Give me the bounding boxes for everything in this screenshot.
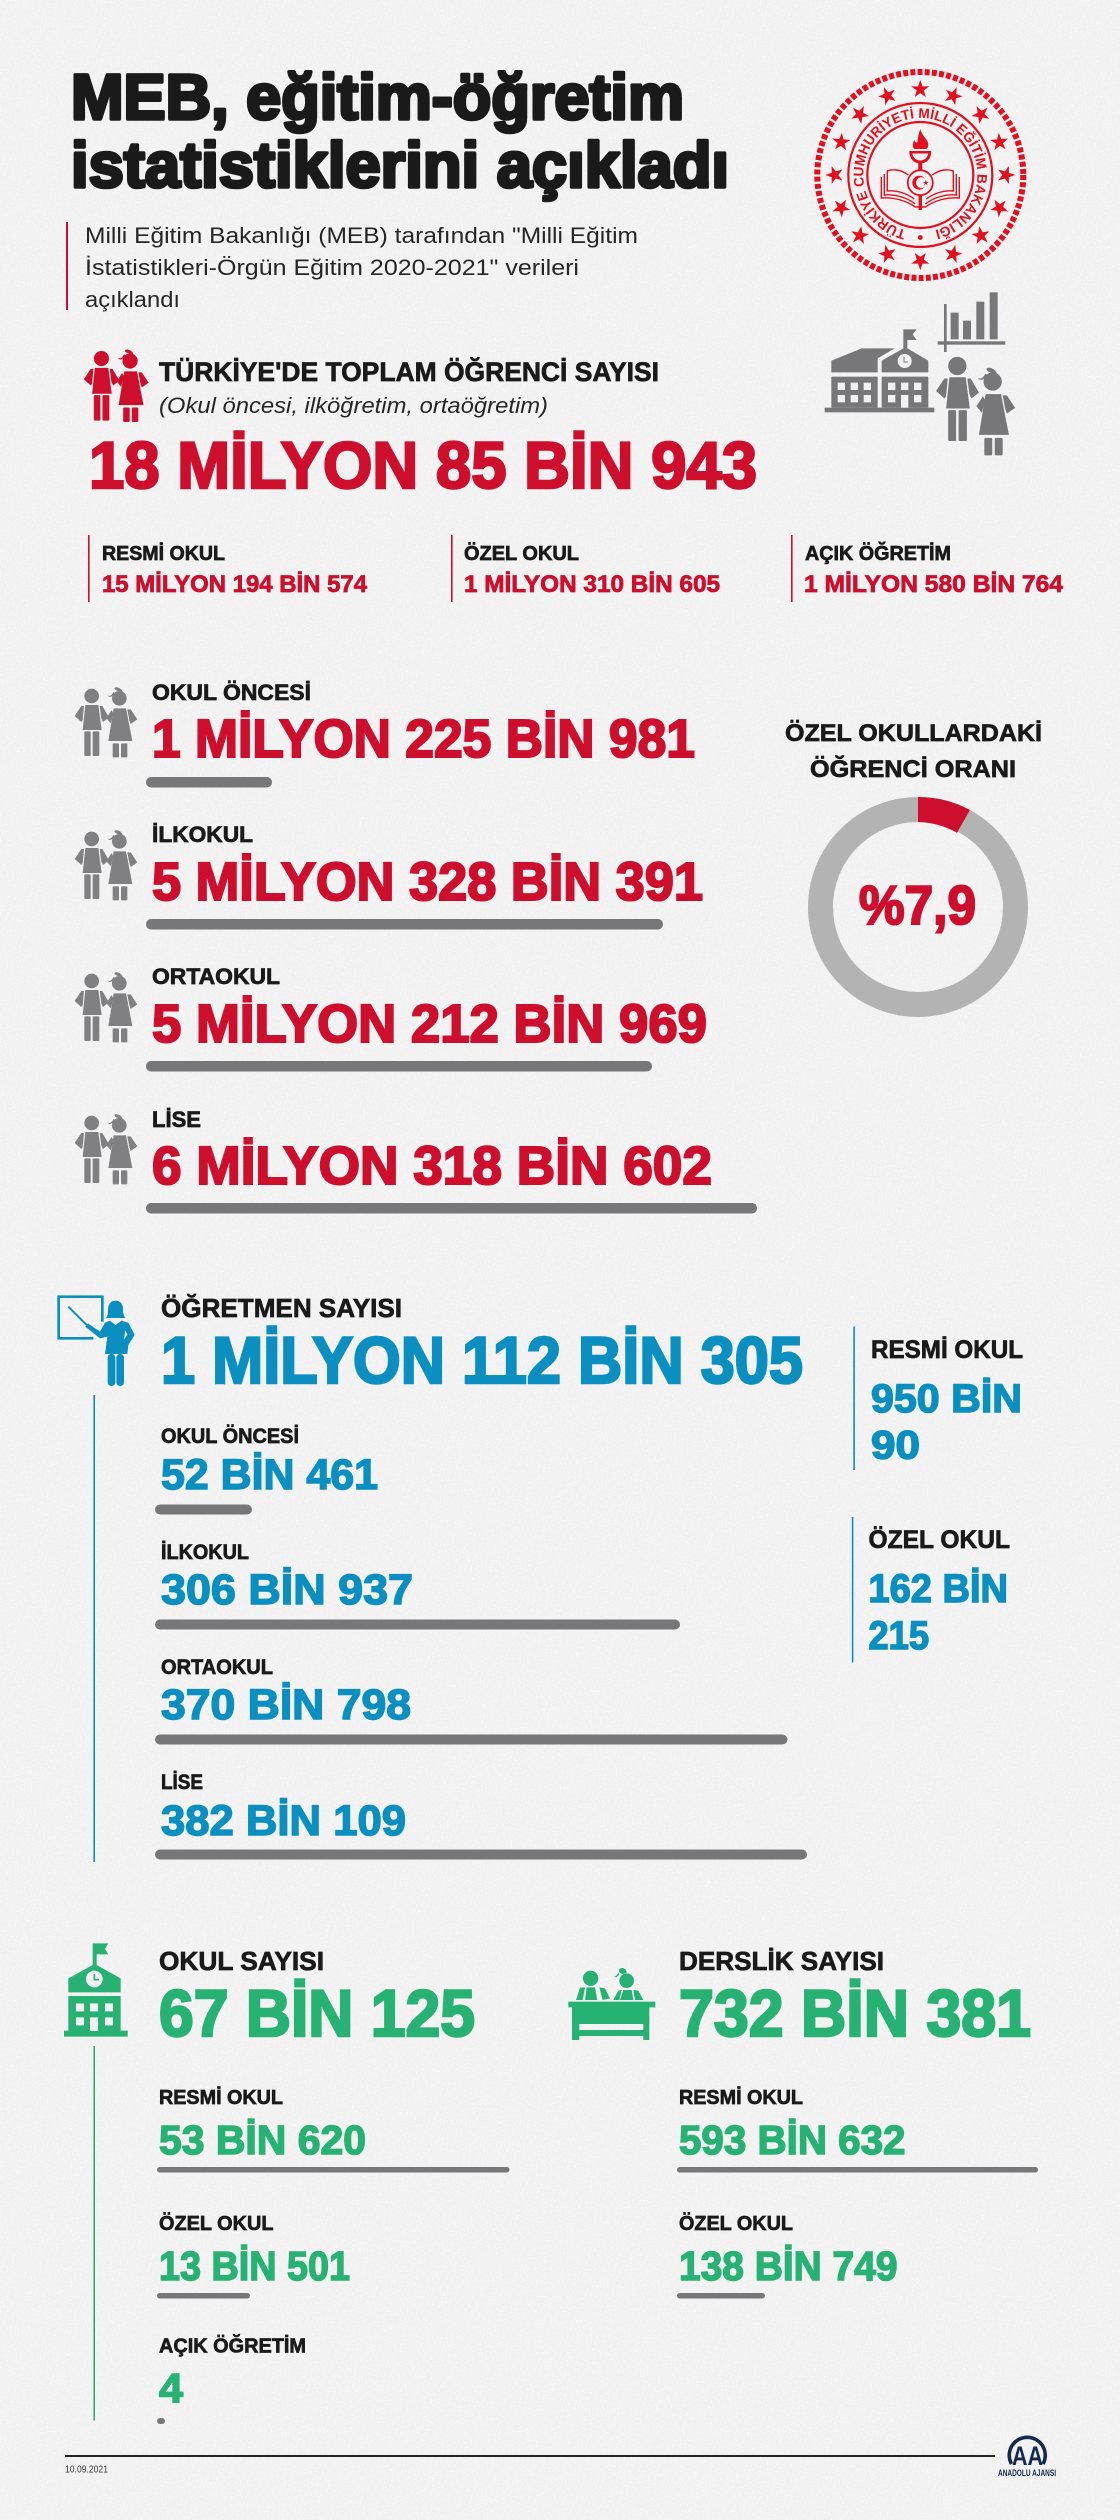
row: lise: 6 MİLYON 318 BİN 602	[152, 1136, 712, 1196]
icon: students	[936, 357, 1015, 455]
panel: breakdown by school type	[88, 535, 1063, 602]
callout: özel okul: ÖZEL OKUL	[868, 1525, 1010, 1554]
icon: students red	[84, 349, 149, 422]
total number: 732 BİN 381	[679, 1976, 1031, 2050]
row: ortaokul	[75, 964, 707, 1072]
callout: özel okul: 162 BİN	[868, 1567, 1008, 1611]
panel: breakdown by school type: 15 MİLYON 194 BİN 574	[102, 571, 367, 598]
footer	[65, 2437, 1056, 2479]
row: açık öğretim: 4	[159, 2365, 183, 2411]
icon: school, chart and students	[825, 292, 1015, 455]
total number: 18 MİLYON 85 BİN 943	[89, 428, 757, 502]
row: resmi okul: RESMİ OKUL	[159, 2086, 283, 2109]
icon: teacher	[59, 1297, 135, 1386]
row: resmi okul	[677, 2086, 1038, 2172]
row: ilkokul: İLKOKUL	[161, 1541, 249, 1564]
row: ilkokul	[75, 822, 703, 930]
icon: bar chart	[938, 292, 1005, 352]
row: resmi okul: 593 BİN 632	[679, 2117, 906, 2163]
heading: ÖZEL OKULLARDAKİ	[785, 720, 1042, 747]
date: 10.09.2021	[65, 2464, 108, 2476]
icon: ministry seal	[814, 69, 1026, 281]
panel: classrooms	[568, 1946, 1038, 2298]
icon: desk with students	[568, 1968, 655, 2040]
callout: resmi okul: 90	[871, 1424, 920, 1468]
row: özel okul: ÖZEL OKUL	[159, 2212, 274, 2235]
panel: students by level	[75, 680, 757, 1214]
panel: total students	[84, 349, 757, 502]
row: ilkokul: 5 MİLYON 328 BİN 391	[152, 852, 703, 912]
callout: resmi okul: RESMİ OKUL	[871, 1336, 1023, 1364]
row: okul öncesi	[155, 1425, 378, 1514]
panel: breakdown by school type: ÖZEL OKUL	[464, 542, 579, 565]
icon: school	[64, 1943, 128, 2037]
icon: Anadolu Ajansı logo: AA	[1012, 2441, 1043, 2471]
subheading: (Okul öncesi, ilköğretim, ortaöğretim)	[159, 393, 548, 418]
row: okul öncesi: 1 MİLYON 225 BİN 981	[152, 709, 695, 769]
row: okul öncesi: 52 BİN 461	[161, 1451, 378, 1499]
row: okul öncesi: OKUL ÖNCESİ	[152, 680, 311, 705]
row: okul öncesi	[75, 680, 695, 788]
panel: breakdown by school type: AÇIK ÖĞRETİM	[805, 541, 951, 565]
intro text block: açıklandı	[85, 287, 180, 312]
title: istatistiklerini açıkladı	[71, 129, 729, 201]
intro text block: Milli Eğitim Bakanlığı (MEB) tarafından "Milli Eğitim	[85, 223, 638, 248]
row: lise: LİSE	[152, 1107, 201, 1132]
panel: breakdown by school type: RESMİ OKUL	[102, 542, 225, 565]
icon: school building	[825, 329, 934, 412]
intro text block: İstatistikleri-Örgün Eğitim 2020-2021" verileri	[85, 255, 579, 280]
icon: ministry seal: TÜRKİYE CUMHURİYETİ MİLLİ EĞİTİM BAKANLIĞI	[854, 106, 988, 240]
heading: OKUL SAYISI	[159, 1946, 324, 1976]
row: ilkokul	[155, 1541, 680, 1630]
heading: ÖĞRENCİ ORANI	[810, 755, 1016, 783]
panel: teachers	[59, 1293, 1023, 1862]
donut chart: %7,9	[859, 874, 976, 936]
row: özel okul	[677, 2212, 898, 2298]
icon: Anadolu Ajansı logo: ANADOLU AJANSI	[998, 2468, 1056, 2479]
row: lise: 382 BİN 109	[161, 1797, 406, 1845]
callout: resmi okul: 950 BİN	[871, 1377, 1022, 1421]
intro text block	[66, 222, 638, 312]
title: MEB, eğitim-öğretim	[71, 61, 684, 133]
title	[71, 61, 729, 201]
row: okul öncesi: OKUL ÖNCESİ	[161, 1425, 299, 1448]
total number: 67 BİN 125	[159, 1976, 475, 2050]
callout: özel okul: 215	[868, 1614, 929, 1658]
heading: TÜRKİYE'DE TOPLAM ÖĞRENCİ SAYISI	[159, 357, 659, 387]
row: özel okul: ÖZEL OKUL	[679, 2212, 793, 2235]
total number: 1 MİLYON 112 BİN 305	[161, 1323, 803, 1397]
panel: breakdown by school type: 1 MİLYON 580 BİN 764	[804, 571, 1063, 598]
row: resmi okul: 53 BİN 620	[159, 2117, 366, 2163]
row: ilkokul: İLKOKUL	[152, 822, 253, 847]
heading: ÖĞRETMEN SAYISI	[161, 1293, 402, 1323]
row: özel okul: 138 BİN 749	[679, 2243, 898, 2289]
heading: DERSLİK SAYISI	[679, 1946, 884, 1976]
row: özel okul: 13 BİN 501	[159, 2243, 350, 2289]
row: lise	[155, 1771, 807, 1860]
row: ortaokul: 5 MİLYON 212 BİN 969	[152, 994, 707, 1054]
row: ortaokul: 370 BİN 798	[161, 1681, 411, 1729]
heading	[785, 720, 1042, 783]
row: lise	[75, 1107, 757, 1214]
row: açık öğretim	[157, 2334, 306, 2424]
row: ilkokul: 306 BİN 937	[161, 1566, 413, 1614]
row: özel okul	[157, 2212, 350, 2298]
callout: resmi okul	[853, 1326, 1023, 1470]
row: ortaokul: ORTAOKUL	[152, 964, 280, 989]
panel: private school share	[785, 720, 1042, 1004]
row: açık öğretim: AÇIK ÖĞRETİM	[159, 2334, 306, 2358]
row: resmi okul: RESMİ OKUL	[679, 2086, 803, 2109]
row: ortaokul: ORTAOKUL	[161, 1656, 273, 1679]
donut chart	[820, 797, 1016, 1004]
row: ortaokul	[155, 1656, 788, 1744]
row: lise: LİSE	[161, 1771, 203, 1794]
row: resmi okul	[157, 2086, 510, 2172]
panel: breakdown by school type: 1 MİLYON 310 BİN 605	[464, 571, 720, 598]
callout: özel okul	[852, 1517, 1010, 1662]
panel: schools	[64, 1943, 510, 2424]
icon: Anadolu Ajansı logo	[998, 2437, 1056, 2479]
